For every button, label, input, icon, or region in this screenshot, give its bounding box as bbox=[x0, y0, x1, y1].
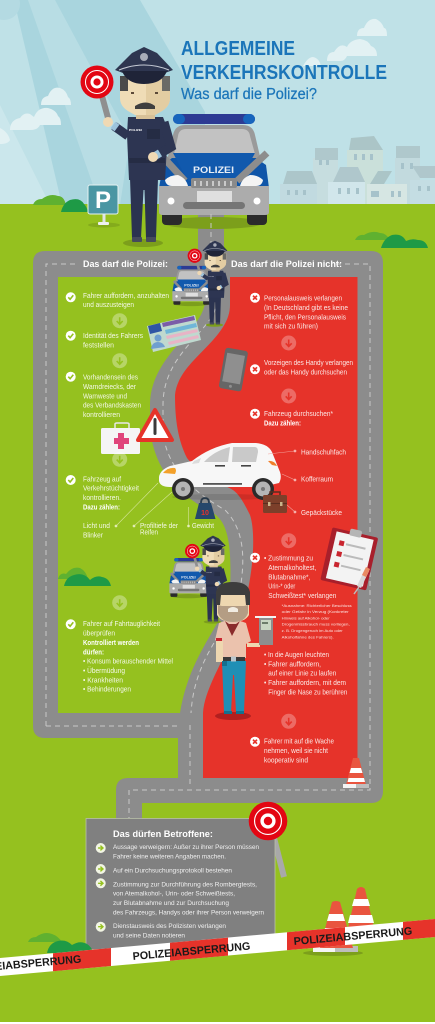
halt sign bottom bbox=[249, 802, 287, 840]
bush bottom left bbox=[28, 933, 93, 953]
callout: tyres bbox=[140, 523, 179, 536]
step: fitness to drive: • Krankheiten bbox=[83, 677, 123, 684]
step: search car: Dazu zählen: bbox=[264, 421, 301, 428]
arrow 1 bbox=[112, 313, 127, 328]
footnote bbox=[282, 604, 352, 639]
step: ID card: mit sich zu führen) bbox=[264, 324, 318, 331]
right 3: des Fahrzeugs, Handys oder ihrer Person verweigern bbox=[113, 909, 264, 916]
arrow red 4 bbox=[281, 714, 296, 729]
arrow 3 bbox=[112, 452, 127, 467]
step: warning equipment: Warnweste und bbox=[83, 393, 127, 400]
step: physical tests: • Fahrer auffordern, mit dem bbox=[264, 680, 346, 687]
police tape bbox=[0, 919, 435, 976]
right 3: Zustimmung zur Durchführung des Rombergtests, bbox=[113, 881, 257, 888]
step: phone: oder das Handy durchsuchen bbox=[264, 369, 347, 376]
icon: weight bbox=[195, 498, 216, 519]
white car bbox=[159, 443, 281, 500]
callout: boot: Kofferraum bbox=[301, 477, 333, 484]
police tape: POLIZEIABSPERRUNG bbox=[132, 941, 251, 963]
callout: glovebox: Handschuhfach bbox=[301, 449, 346, 456]
road centre lines bbox=[46, 214, 370, 818]
step: stop and exit: und auszusteigen bbox=[83, 302, 134, 309]
panel: rights of affected persons bbox=[86, 818, 275, 950]
parking sign bbox=[88, 185, 120, 228]
step: fitness to drive: • Übermüdung bbox=[83, 667, 125, 675]
step: identity: Identität des Fahrers bbox=[83, 333, 143, 340]
heading right: Das darf die Polizei nicht: bbox=[231, 259, 342, 270]
driving licence card bbox=[147, 315, 201, 352]
step: police station: nehmen, weil sie nicht bbox=[264, 748, 328, 755]
step: stop and exit: Fahrer auffordern, anzuhalten bbox=[83, 293, 169, 300]
step: warning equipment: kontrollieren bbox=[83, 412, 120, 419]
first aid kit bbox=[101, 423, 140, 454]
icon: smartphone bbox=[219, 347, 248, 392]
right 1 bbox=[96, 843, 259, 860]
step: warning equipment: Vorhandensein des bbox=[83, 375, 138, 382]
step: roadworthiness: Fahrzeug auf bbox=[83, 476, 121, 483]
right 1: Fahrer keine weiteren Angaben machen. bbox=[113, 853, 226, 860]
right 3 bbox=[96, 878, 264, 916]
step: physical tests: • In die Augen leuchten bbox=[264, 652, 329, 659]
sky light rays bbox=[0, 0, 205, 205]
small police officer top bbox=[188, 241, 227, 327]
parking sign: P bbox=[95, 187, 111, 214]
step: ID card bbox=[250, 293, 348, 331]
footnote: Drogenmissbrauch muss vorliegen, bbox=[282, 623, 350, 627]
step: tests bbox=[250, 553, 336, 600]
step: police station bbox=[250, 737, 334, 764]
police officer large bbox=[80, 47, 173, 247]
step: tests: Blutabnahme*, bbox=[268, 574, 310, 581]
right 3: zur Blutabnahme und zur Durchsuchung bbox=[113, 900, 229, 907]
arrow red 2 bbox=[281, 388, 296, 404]
small police car lower bbox=[169, 558, 208, 598]
callout: luggage: Gepäckstücke bbox=[301, 510, 342, 517]
driver figure bbox=[215, 582, 260, 720]
right 2: Auf ein Durchsuchungsprotokoll bestehen bbox=[113, 867, 232, 874]
right 3: von Atemalkohol-, Urin- oder Schweißtests, bbox=[113, 891, 235, 898]
icon: clipboard and syringe bbox=[320, 524, 379, 594]
step: search car bbox=[250, 409, 333, 428]
step: police station: Fahrer mit auf die Wache bbox=[264, 739, 334, 746]
police car large bbox=[159, 114, 269, 229]
callout: tyres: Reifen bbox=[140, 530, 158, 536]
callout: lights bbox=[83, 523, 110, 539]
step: roadworthiness: Verkehrstüchtigkeit bbox=[83, 486, 139, 493]
step: tests: Atemalkoholtest, bbox=[268, 565, 316, 572]
step: roadworthiness bbox=[66, 475, 139, 511]
step: physical tests: auf einer Linie zu laufen bbox=[268, 671, 336, 678]
title line 2: VERKEHRSKONTROLLE bbox=[181, 61, 387, 84]
title block bbox=[181, 37, 387, 103]
red field right bbox=[175, 277, 358, 778]
title line 1: ALLGEMEINE bbox=[181, 37, 295, 60]
right 1: Aussage verweigern: Außer zu ihrer Person müssen bbox=[113, 844, 259, 851]
halt sign stick bottom bbox=[274, 838, 284, 877]
ground bbox=[0, 204, 435, 1022]
small police car top bbox=[172, 266, 211, 306]
step: roadworthiness: Dazu zählen: bbox=[83, 504, 120, 511]
warning triangle bbox=[138, 410, 172, 440]
callout lines left bbox=[115, 483, 190, 527]
small police officer lower bbox=[185, 536, 226, 624]
right 4: und seine Daten notieren bbox=[113, 932, 185, 939]
step: fitness to drive: überprüfen bbox=[83, 631, 115, 638]
callout: lights: Licht und bbox=[83, 523, 110, 530]
step: ID card: Pflicht, den Personalausweis bbox=[264, 314, 346, 321]
heading left: Das darf die Polizei: bbox=[83, 259, 168, 270]
footnote: Hinweis auf Alkohol- oder bbox=[282, 616, 331, 620]
step: physical tests bbox=[264, 652, 347, 696]
arrow 4 bbox=[112, 595, 127, 610]
callout lines right bbox=[268, 450, 296, 513]
step: tests: Schweißtest* verlangen bbox=[268, 593, 336, 600]
bushes top right bbox=[355, 232, 428, 248]
traffic cone bbox=[343, 758, 369, 788]
step: phone: Vorzeigen des Handy verlangen bbox=[264, 360, 353, 367]
step: roadworthiness: kontrollieren. bbox=[83, 495, 121, 502]
road stub to main road bbox=[198, 212, 224, 252]
icon: weight: 10 bbox=[201, 510, 209, 517]
step: identity bbox=[66, 331, 143, 349]
footnote: *Ausnahme: Richterlicher Beschluss bbox=[282, 604, 352, 608]
road network bbox=[33, 251, 383, 822]
step: fitness to drive: dürfen: bbox=[83, 649, 104, 656]
right 4: Dienstausweis des Polizisten verlangen bbox=[113, 923, 226, 930]
cones bottom bbox=[303, 887, 375, 956]
background sky bbox=[0, 0, 435, 205]
step: fitness to drive bbox=[66, 619, 173, 694]
arrow 2 bbox=[112, 353, 127, 368]
clouds bbox=[0, 19, 387, 144]
callout: weight: Gewicht bbox=[192, 523, 214, 530]
step: phone bbox=[250, 360, 353, 376]
step: physical tests: Finger die Nase zu berühren bbox=[268, 689, 347, 696]
step: search car: Fahrzeug durchsuchen* bbox=[264, 411, 333, 418]
step: fitness to drive: Fahrer auf Fahrtauglichkeit bbox=[83, 621, 160, 628]
step: fitness to drive: • Konsum berauschender Mittel bbox=[83, 659, 173, 666]
step: warning equipment bbox=[66, 372, 141, 419]
right 4 bbox=[96, 922, 226, 939]
step: police station: kooperativ sind bbox=[264, 757, 308, 764]
step: fitness to drive: • Behinderungen bbox=[83, 687, 131, 694]
green field left bbox=[58, 277, 230, 713]
callout: tyres: Profiltiefe der bbox=[140, 523, 179, 530]
footnote: oder Gefahr in Verzug (Konkreter bbox=[282, 610, 350, 614]
footnote: Alkoholfahne des Fahrers). bbox=[282, 635, 334, 639]
step: identity: feststellen bbox=[83, 342, 114, 349]
icon: briefcase bbox=[263, 492, 287, 513]
step: warning equipment: des Verbandskasten bbox=[83, 403, 141, 410]
callout: lights: Blinker bbox=[83, 532, 104, 539]
arrow red 3 bbox=[281, 533, 296, 548]
step: warning equipment: Warndreiecks, der bbox=[83, 384, 137, 391]
step: tests: • Zustimmung zu bbox=[264, 556, 313, 563]
step: ID card: Personalausweis verlangen bbox=[264, 296, 342, 303]
step: fitness to drive: Kontrolliert werden bbox=[83, 640, 139, 647]
step: stop and exit bbox=[66, 292, 169, 309]
panel heading: Das dürfen Betroffene: bbox=[113, 829, 213, 840]
subtitle: Was darf die Polizei? bbox=[181, 86, 317, 103]
step: ID card: (In Deutschland gibt es keine bbox=[264, 305, 348, 312]
right 2 bbox=[96, 864, 232, 874]
step: tests: Urin-* oder bbox=[268, 584, 296, 591]
police tape: POLIZEIABSPERRUNG bbox=[293, 925, 413, 948]
bush middle left bbox=[58, 568, 111, 586]
town silhouette bbox=[280, 136, 435, 204]
step: physical tests: • Fahrer auffordern, bbox=[264, 661, 321, 668]
bushes top left bbox=[33, 195, 88, 212]
breathalyser device bbox=[255, 616, 276, 645]
arrow red 1 bbox=[281, 336, 296, 350]
footnote: z. B. Drogengeruch im Auto oder bbox=[282, 629, 344, 633]
